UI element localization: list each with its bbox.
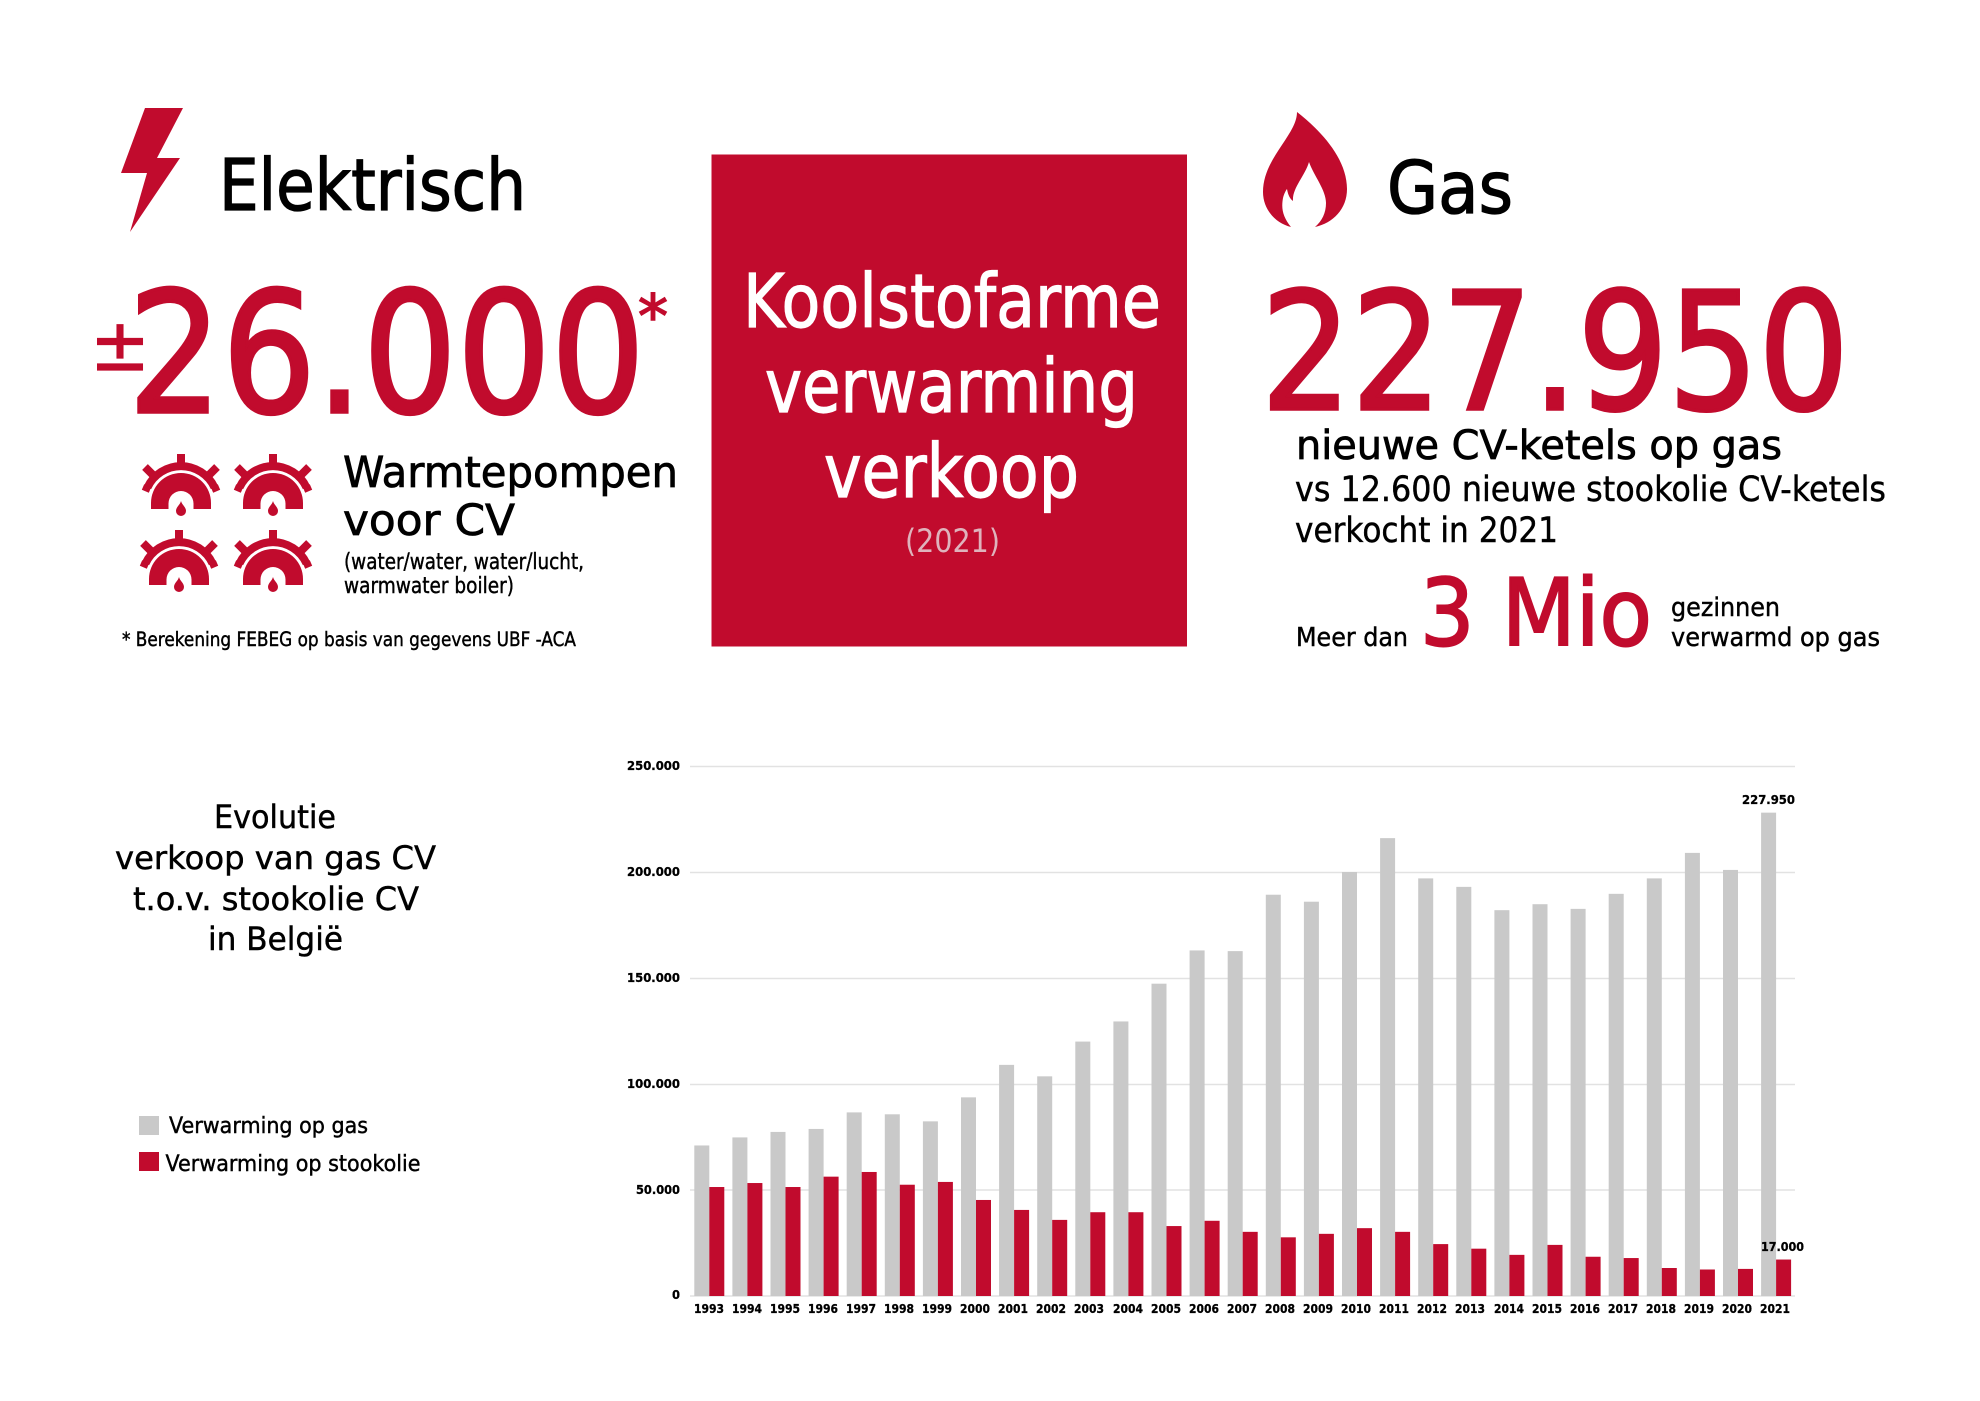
x axis year labels: 1998 [884, 1301, 914, 1316]
title: Koolstofarme verwarming verkoop: verkoop [824, 429, 1079, 515]
x axis year labels: 2014 [1494, 1301, 1524, 1316]
x axis year labels: 2019 [1684, 1301, 1714, 1316]
x axis year labels: 2011 [1379, 1301, 1409, 1316]
value label: 227.950: 227.950 [1742, 792, 1795, 807]
x axis year labels: 2018 [1646, 1301, 1676, 1316]
heading: Gas: Gas [1387, 146, 1513, 230]
value label: 17.000: 17.000 [1761, 1239, 1804, 1254]
text: heat pump types [344, 550, 584, 599]
y axis labels: 50.000 [636, 1182, 680, 1197]
x axis year labels: 2002 [1036, 1301, 1066, 1316]
panel: central title block [712, 154, 1187, 646]
text: stookolie comparison: vs 12.600 nieuwe stookolie CV-ketels [1295, 470, 1886, 510]
stat: 3 Mio: 3 Mio [1420, 559, 1652, 667]
text: heat pump types: warmwater boiler) [344, 574, 514, 599]
legend item: stookolie: Verwarming op stookolie [166, 1152, 420, 1177]
big number: 26.000: 26.000 [128, 256, 645, 452]
x axis year labels: 1997 [846, 1301, 876, 1316]
legend item: gas: Verwarming op gas [169, 1114, 368, 1139]
icons: four heat pumps [141, 454, 311, 592]
heading: Elektrisch: Elektrisch [219, 144, 526, 227]
x axis year labels: 2010 [1341, 1301, 1371, 1316]
legend [139, 1114, 420, 1177]
bars: verwarming op gas [694, 813, 1776, 1296]
text: Warmtepompen voor CV [343, 448, 678, 546]
text: stookolie comparison: verkocht in 2021 [1295, 511, 1558, 551]
y axis labels: 100.000 [627, 1076, 680, 1091]
icon: flame [1263, 112, 1347, 227]
x axis year labels: 2006 [1189, 1301, 1219, 1316]
x axis year labels: 2015 [1532, 1301, 1562, 1316]
subtitle: year: (2021) [905, 522, 1000, 560]
y axis labels: 150.000 [627, 970, 680, 985]
y axis labels [627, 758, 680, 1302]
plus-minus sign: ± [90, 303, 150, 387]
bars: verwarming op stookolie [709, 1172, 1791, 1296]
x axis year labels: 2021 [1760, 1301, 1790, 1316]
x axis year labels: 2000 [960, 1301, 990, 1316]
text: nieuwe CV-ketels op gas: nieuwe CV-ketels op gas [1296, 423, 1782, 469]
x axis year labels: 2017 [1608, 1301, 1638, 1316]
x axis year labels: 2005 [1151, 1301, 1181, 1316]
chart heading [115, 798, 436, 958]
y axis labels: 250.000 [627, 758, 680, 773]
x axis year labels: 2012 [1417, 1301, 1447, 1316]
chart heading: verkoop van gas CV [115, 839, 436, 877]
chart heading: Evolutie [214, 798, 336, 836]
panel: elektrisch [90, 108, 678, 651]
title: Koolstofarme verwarming verkoop [743, 259, 1161, 515]
text: gezinnen verwarmd op gas: verwarmd op gas [1671, 623, 1880, 653]
title: Koolstofarme verwarming verkoop: Koolstofarme [743, 259, 1161, 345]
x axis year labels: 1999 [922, 1301, 952, 1316]
text: gezinnen verwarmd op gas [1671, 593, 1880, 653]
x axis year labels: 1995 [770, 1301, 800, 1316]
x axis year labels: 2013 [1455, 1301, 1485, 1316]
x axis year labels: 2009 [1303, 1301, 1333, 1316]
x axis year labels: 2001 [998, 1301, 1028, 1316]
x axis year labels: 1996 [808, 1301, 838, 1316]
text: stookolie comparison [1295, 470, 1886, 551]
chart heading: in België [208, 920, 343, 958]
x axis year labels: 2003 [1074, 1301, 1104, 1316]
x axis year labels: 2004 [1113, 1301, 1143, 1316]
x axis year labels: 2008 [1265, 1301, 1295, 1316]
panel: gas [1261, 112, 1886, 667]
title: Koolstofarme verwarming verkoop: verwarming [765, 344, 1138, 430]
x axis year labels: 1994 [732, 1301, 762, 1316]
red background square [712, 154, 1187, 646]
x axis year labels: 1993 [694, 1301, 724, 1316]
big number: 227.950: 227.950 [1261, 259, 1849, 448]
footnote asterisk: * [638, 282, 668, 352]
text: gezinnen verwarmd op gas: gezinnen [1671, 593, 1780, 623]
y axis labels: 200.000 [627, 864, 680, 879]
text: Meer dan: Meer dan [1296, 623, 1408, 653]
x axis year labels [694, 1301, 1790, 1316]
text: Warmtepompen voor CV: voor CV [343, 496, 516, 546]
text: Warmtepompen voor CV: Warmtepompen [343, 448, 678, 498]
y axis labels: 0 [672, 1287, 680, 1302]
x axis year labels: 2007 [1227, 1301, 1257, 1316]
x axis year labels: 2016 [1570, 1301, 1600, 1316]
bar chart [627, 758, 1804, 1316]
x axis year labels: 2020 [1722, 1301, 1752, 1316]
icon: lightning bolt [121, 108, 183, 232]
chart heading: t.o.v. stookolie CV [133, 880, 419, 918]
text: heat pump types: (water/water, water/lucht, [344, 550, 584, 575]
footnote text: * Berekening FEBEG op basis van gegevens UBF -ACA [122, 628, 577, 651]
